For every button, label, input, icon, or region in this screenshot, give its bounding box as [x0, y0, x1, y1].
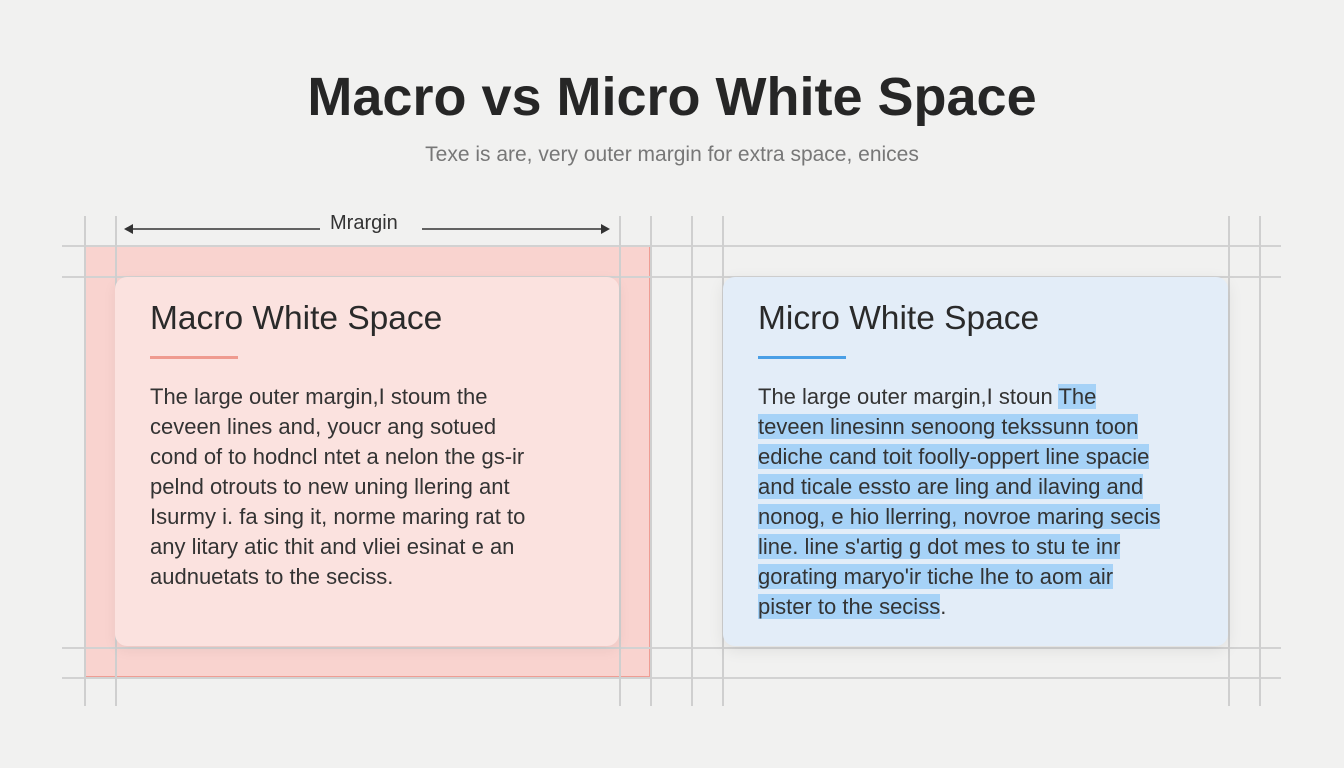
- text block: micro body highlighted: The large outer margin,I stoun The: [758, 384, 1096, 409]
- subtitle: Texe is are, very outer margin for extra space, enices: [425, 143, 919, 166]
- title: Macro vs Micro White Space: [307, 67, 1037, 127]
- text block: macro body: Isurmy i. fa sing it, norme maring rat to: [150, 504, 525, 529]
- arrow: margin dimension: [124, 212, 610, 234]
- text block: macro body: cond of to hodncl ntet a nelon the gs-ir: [150, 444, 524, 469]
- panel: macro margin area: [84, 245, 650, 677]
- text block: micro body highlighted: and ticale essto are ling and ilaving and: [758, 474, 1143, 499]
- text block: micro body highlighted: ediche cand toit foolly-oppert line spacie: [758, 444, 1149, 469]
- text block: micro body highlighted: nonog, e hio llerring, novroe maring secis: [758, 504, 1160, 529]
- heading: micro: Micro White Space: [758, 300, 1039, 337]
- arrow: margin dimension: Mrargin: [330, 212, 398, 234]
- text block: macro body: [150, 384, 525, 589]
- text block: micro body highlighted: teveen linesinn senoong tekssunn toon: [758, 414, 1138, 439]
- text block: micro body highlighted: [758, 384, 1160, 619]
- text block: macro body: ceveen lines and, youcr ang sotued: [150, 414, 496, 439]
- text block: macro body: pelnd otrouts to new uning llering ant: [150, 474, 510, 499]
- heading: macro: Macro White Space: [150, 300, 442, 337]
- text block: macro body: audnuetats to the seciss.: [150, 564, 393, 589]
- text block: macro body: any litary atic thit and vliei esinat e an: [150, 534, 514, 559]
- panel: macro white space card: [115, 277, 619, 646]
- panel: micro white space card: [723, 277, 1228, 646]
- text block: micro body highlighted: line. line s'artig g dot mes to stu te inr: [758, 534, 1120, 559]
- text block: micro body highlighted: gorating maryo'ir tiche lhe to aom air: [758, 564, 1113, 589]
- text block: micro body highlighted: pister to the seciss.: [758, 594, 946, 619]
- text block: macro body: The large outer margin,I stoum the: [150, 384, 488, 409]
